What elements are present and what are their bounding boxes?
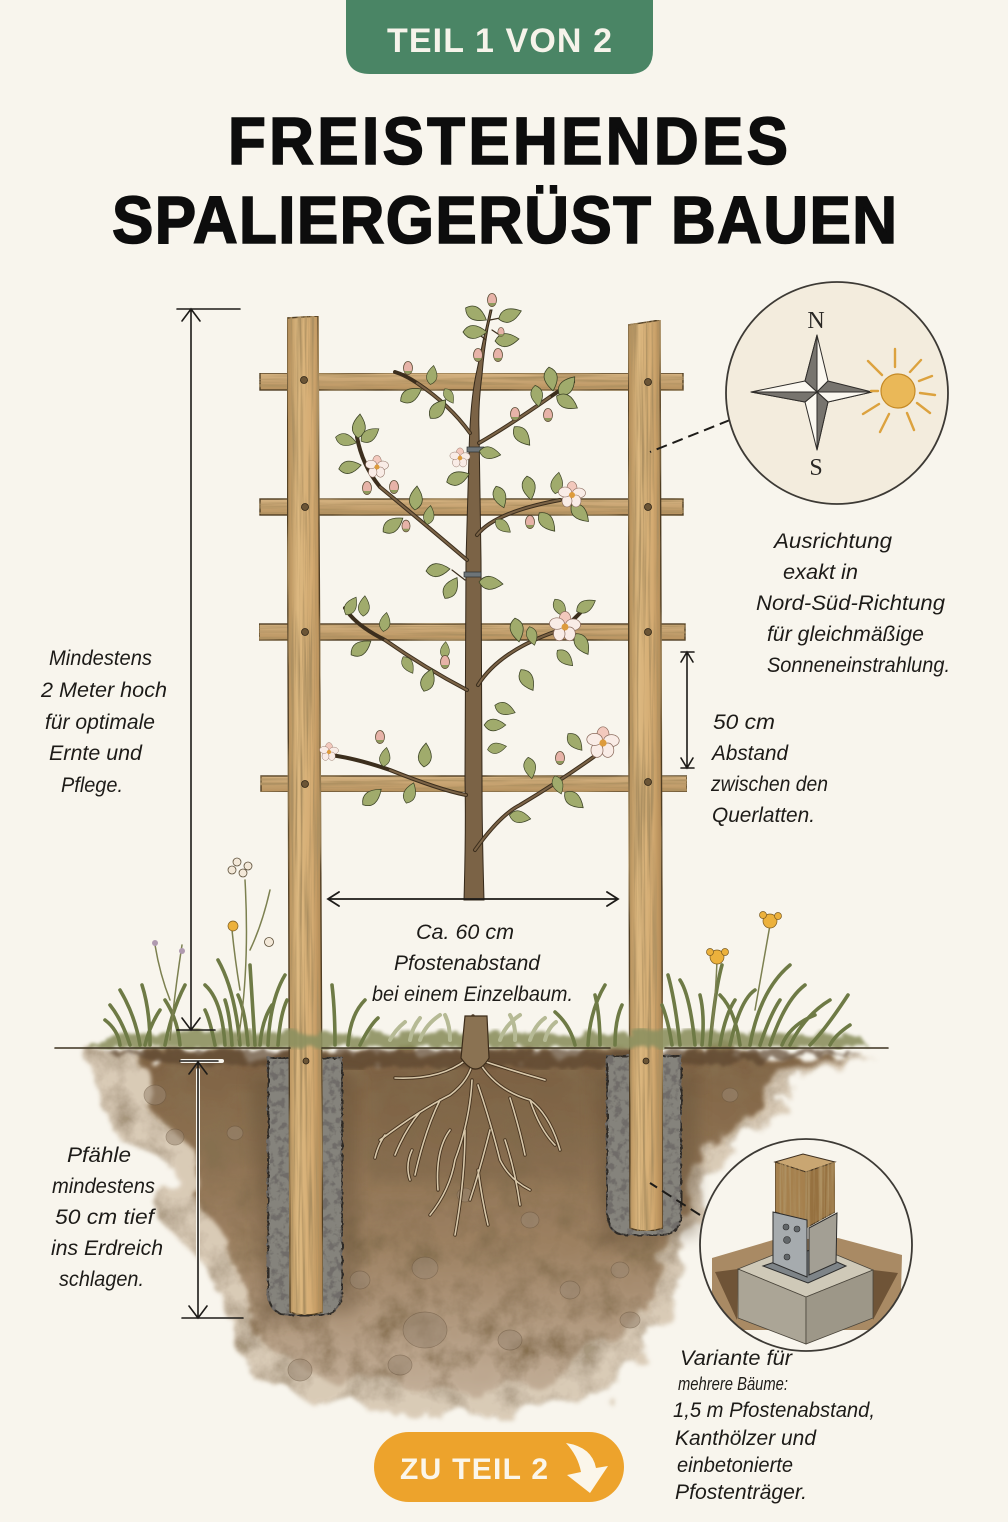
right post bbox=[628, 320, 663, 1231]
note: slat spacing: Abstand bbox=[710, 742, 789, 765]
compass letters: S bbox=[809, 455, 823, 481]
cross slats bbox=[259, 373, 687, 792]
post bracket inset bbox=[650, 1139, 912, 1351]
dimension: 2 m height bbox=[177, 309, 240, 1030]
espalier tree bbox=[320, 294, 619, 900]
note: orientation bbox=[756, 530, 950, 677]
note: post depth: ins Erdreich bbox=[51, 1237, 163, 1260]
note: slat spacing: Querlatten. bbox=[712, 804, 815, 827]
branches bbox=[330, 316, 610, 850]
compass star bbox=[751, 335, 872, 450]
tree roots bbox=[375, 1016, 560, 1235]
note: post spacing bbox=[372, 921, 573, 1006]
concrete footing: right post bbox=[607, 1056, 681, 1235]
badge: part 1 of 2: TEIL 1 VON 2 bbox=[387, 22, 612, 60]
ties bbox=[464, 447, 484, 577]
grass and wildflowers bbox=[55, 858, 888, 1048]
dimension: 50 cm depth bbox=[180, 1061, 243, 1318]
note: variant for several trees bbox=[673, 1347, 875, 1504]
note: variant for several trees: mehrere Bäume: bbox=[678, 1374, 788, 1394]
trunk bbox=[464, 310, 492, 900]
button: to part 2 bbox=[374, 1432, 624, 1502]
button: to part 2: ZU TEIL 2 bbox=[400, 1453, 548, 1486]
note: variant for several trees: einbetonierte bbox=[677, 1454, 793, 1477]
note: orientation: Ausrichtung bbox=[772, 530, 892, 553]
note: orientation: für gleichmäßige bbox=[767, 623, 924, 646]
blossoms and buds bbox=[320, 294, 619, 764]
badge: part 1 of 2 bbox=[346, 0, 653, 74]
note: minimum height bbox=[40, 647, 167, 797]
note: orientation: exakt in bbox=[783, 561, 858, 584]
stones in soil bbox=[144, 1085, 738, 1381]
note: minimum height: Mindestens bbox=[49, 647, 152, 670]
title: SPALIERGERÜST BAUEN bbox=[112, 183, 897, 258]
note: variant for several trees: Pfostenträger. bbox=[675, 1481, 807, 1504]
note: variant for several trees: Variante für bbox=[680, 1347, 793, 1370]
note: post depth: mindestens bbox=[52, 1175, 155, 1198]
note: slat spacing: 50 cm bbox=[713, 711, 775, 734]
note: post depth: Pfähle bbox=[67, 1144, 131, 1167]
note: variant for several trees: Kanthölzer und bbox=[675, 1427, 817, 1450]
note: post spacing: Ca. 60 cm bbox=[416, 921, 514, 944]
note: orientation: Sonneneinstrahlung. bbox=[767, 654, 950, 677]
title bbox=[112, 104, 897, 258]
compass letters: N bbox=[807, 308, 825, 334]
sun bbox=[863, 349, 935, 432]
icon: curved arrow bbox=[566, 1443, 608, 1493]
note: post spacing: Pfostenabstand bbox=[394, 952, 541, 975]
note: variant for several trees: 1,5 m Pfostenabstand, bbox=[673, 1399, 875, 1422]
note: minimum height: Pflege. bbox=[61, 774, 123, 797]
note: post spacing: bei einem Einzelbaum. bbox=[372, 983, 573, 1006]
note: post depth: schlagen. bbox=[59, 1268, 144, 1291]
concrete footing: left post bbox=[268, 1058, 342, 1315]
soil cross-section bbox=[85, 1050, 875, 1415]
note: minimum height: Ernte und bbox=[49, 742, 143, 765]
note: minimum height: für optimale bbox=[45, 711, 155, 734]
title: FREISTEHENDES bbox=[228, 104, 788, 179]
compass letters bbox=[807, 308, 825, 481]
note: slat spacing: zwischen den bbox=[710, 773, 828, 796]
dimension: 60 cm post spacing bbox=[328, 892, 618, 906]
dimension: 50 cm slat spacing bbox=[681, 652, 694, 768]
note: slat spacing bbox=[710, 711, 828, 827]
note: orientation: Nord-Süd-Richtung bbox=[756, 592, 945, 615]
note: post depth: 50 cm tief bbox=[55, 1206, 156, 1229]
left post bbox=[287, 316, 323, 1315]
compass inset bbox=[650, 282, 948, 504]
note: post depth bbox=[51, 1144, 163, 1291]
note: minimum height: 2 Meter hoch bbox=[40, 679, 167, 702]
leaves bbox=[334, 302, 598, 825]
